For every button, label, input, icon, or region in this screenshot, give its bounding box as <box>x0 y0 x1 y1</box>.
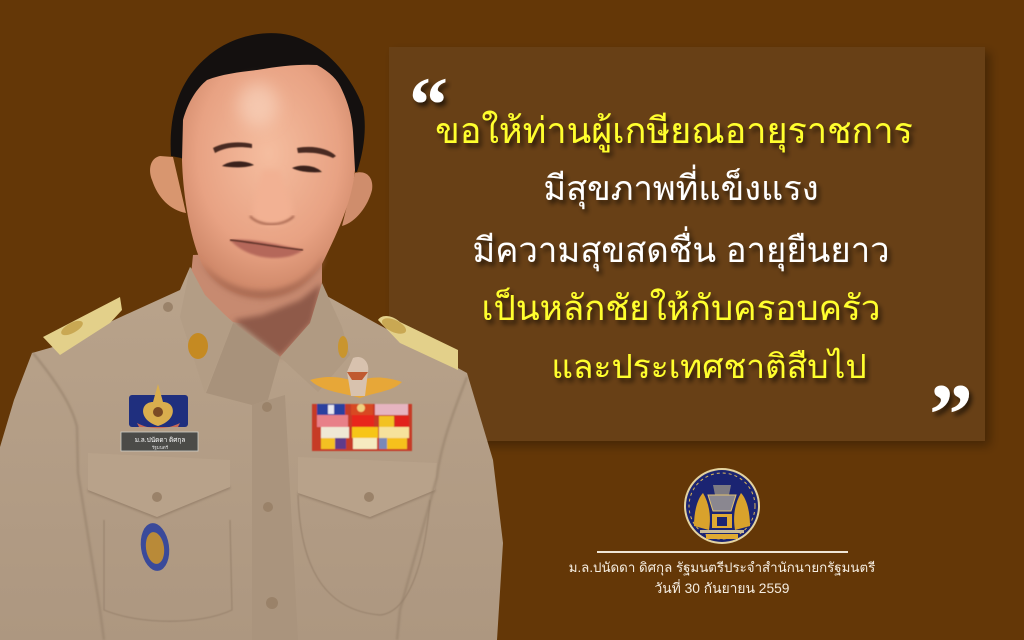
forehead highlight <box>238 83 278 127</box>
name and title: ม.ล.ปนัดดา ดิศกุล รัฐมนตรีประจำสำนักนายกรัฐมนตรี <box>569 560 875 576</box>
name tag: รัฐมนตรี <box>152 445 169 451</box>
divider <box>597 551 848 553</box>
collar pin left <box>188 333 208 359</box>
quote text <box>435 110 913 386</box>
sleeve folds <box>33 353 104 640</box>
opening quote mark: “ <box>409 61 448 148</box>
line 3: มีความสุขสดชื่น อายุยืนยาว <box>472 226 890 271</box>
hair <box>171 33 365 172</box>
pocket left <box>88 453 232 621</box>
neck <box>190 250 322 357</box>
face <box>182 65 355 298</box>
seal emblem <box>684 468 760 544</box>
ribbons <box>312 404 412 451</box>
name tag <box>121 432 198 451</box>
line 5: และประเทศชาติสืบไป <box>551 347 867 386</box>
line 1: ขอให้ท่านผู้เกษียณอายุราชการ <box>435 110 913 153</box>
shirt placket <box>252 395 298 640</box>
wings badge <box>310 357 402 398</box>
pocket right <box>298 457 437 615</box>
portrait of the minister <box>0 33 503 640</box>
collar right <box>280 283 350 392</box>
caption <box>569 560 875 596</box>
collar pin right <box>338 336 348 358</box>
smile lines and mouth <box>230 240 303 258</box>
lower badge <box>138 521 172 573</box>
collar left <box>180 267 233 393</box>
line 2: มีสุขภาพที่แข็งแรง <box>543 164 819 209</box>
date: วันที่ 30 กันยายน 2559 <box>655 579 790 596</box>
uniform body <box>0 267 503 640</box>
panel: quote box <box>389 47 985 441</box>
line 4: เป็นหลักชัยให้กับครอบครัว <box>482 287 880 328</box>
blue pin <box>309 461 330 492</box>
nose <box>253 170 292 225</box>
eyebrows <box>213 142 252 153</box>
epaulette right <box>378 315 458 370</box>
epaulette left <box>43 297 122 355</box>
badge left <box>129 384 188 428</box>
eyes <box>222 161 322 172</box>
buttons <box>152 302 374 609</box>
cheek shading <box>196 255 325 299</box>
closing quote mark: ” <box>929 367 973 464</box>
name tag: ม.ล.ปนัดดา ดิศกุล <box>135 436 185 444</box>
inner shirt <box>206 323 280 405</box>
ears <box>150 156 186 213</box>
